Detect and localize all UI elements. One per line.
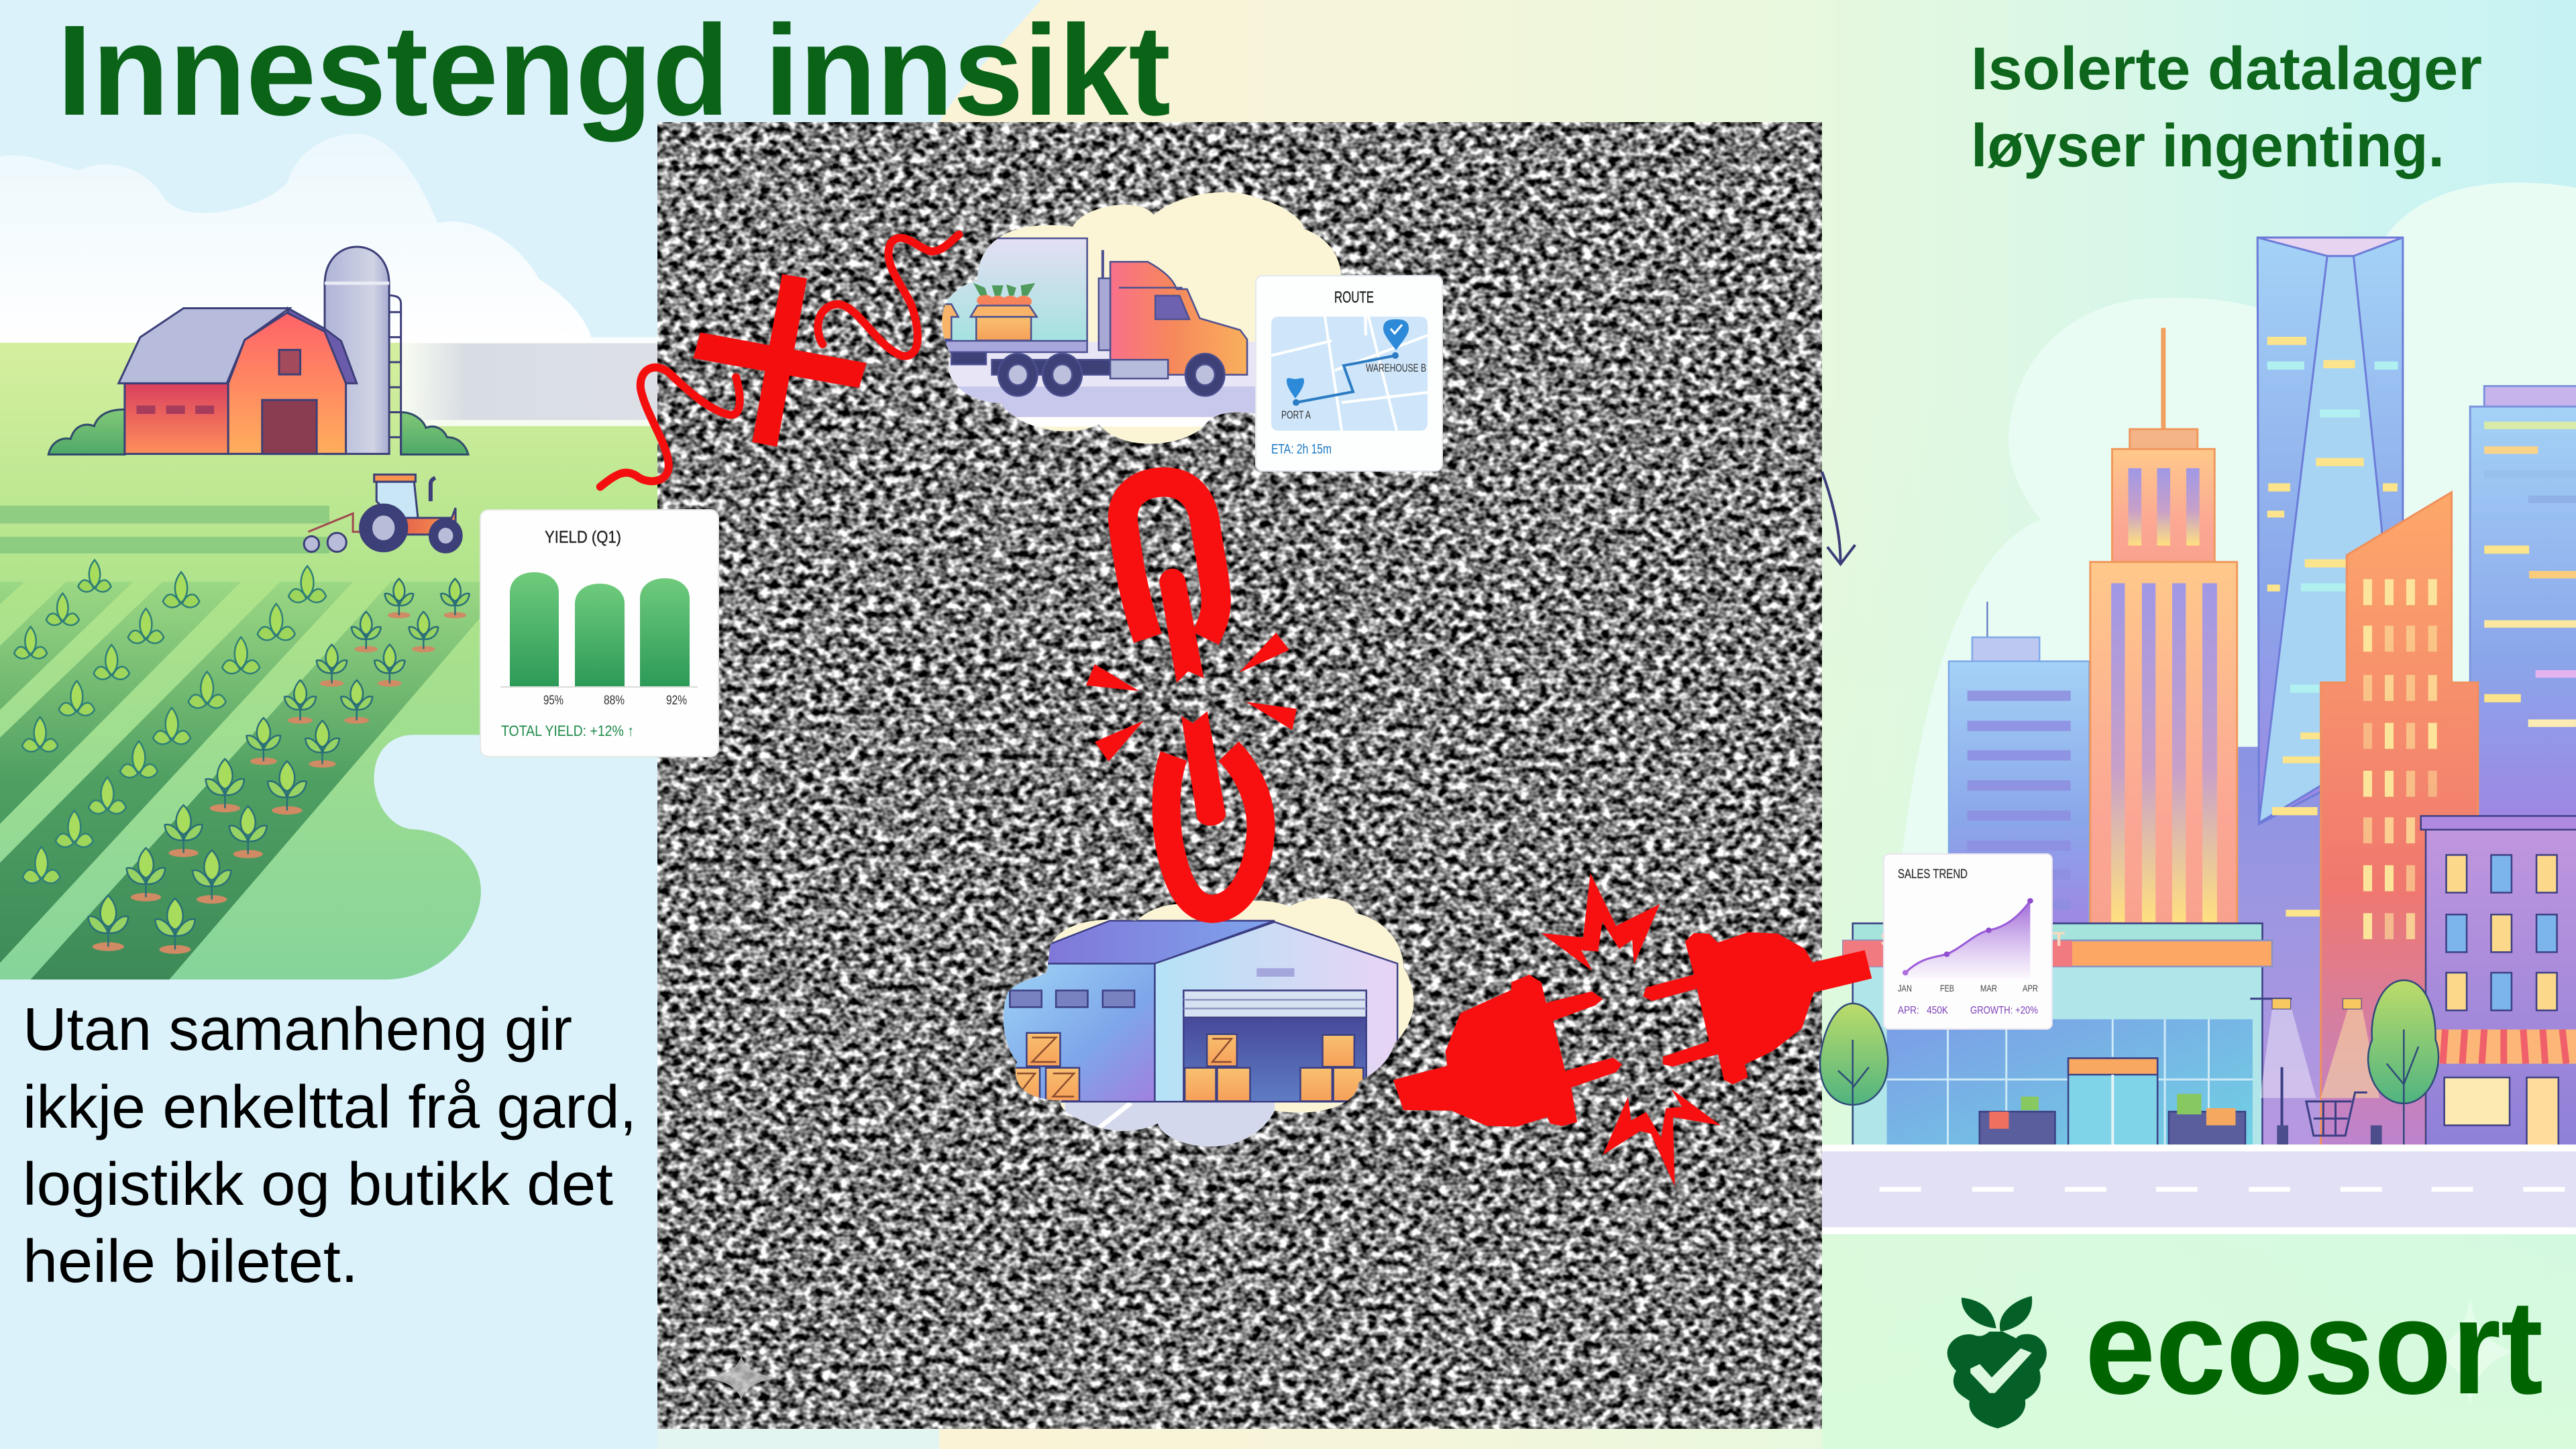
field	[0, 343, 659, 979]
card title: ROUTE	[1334, 288, 1374, 307]
icon: truck	[940, 238, 1247, 396]
map labels	[1281, 362, 1426, 421]
backdrop blobs	[1892, 182, 2576, 954]
icon: ecosort berry	[1947, 1296, 2047, 1428]
body text: logistikk og butikk det	[23, 1151, 613, 1218]
left blue building	[1949, 602, 2089, 928]
route card	[1256, 276, 1442, 471]
icon: warehouse	[993, 920, 1397, 1102]
month labels: JAN	[1898, 983, 1912, 994]
clouds	[0, 134, 593, 344]
silo	[325, 247, 401, 454]
arrow	[1822, 472, 1855, 564]
line chart	[1902, 898, 2033, 978]
barn	[119, 308, 357, 454]
right plug	[1643, 932, 1872, 1085]
yield card	[480, 510, 718, 757]
logo	[1947, 1273, 2543, 1428]
road	[1822, 1144, 2576, 1234]
card title: YIELD (Q1)	[545, 528, 621, 547]
city scene	[1820, 182, 2576, 1234]
pin	[1383, 319, 1409, 350]
tractor	[304, 474, 462, 552]
wavy broken connection	[600, 235, 1297, 909]
ETA: ETA: 2h 15m	[1271, 442, 1332, 457]
street lamps	[2250, 999, 2382, 1146]
month labels: APR	[2023, 983, 2038, 994]
glass tower	[2257, 237, 2403, 916]
heading: right: løyser ingenting.	[1971, 113, 2445, 180]
sales card	[1884, 854, 2052, 1029]
seedlings	[14, 560, 470, 954]
orange block	[2321, 492, 2478, 1149]
bar labels	[543, 694, 687, 708]
truck cloud	[942, 192, 1341, 444]
spark	[1603, 1089, 1721, 1187]
icon: sparkle	[706, 1356, 779, 1400]
month labels	[1898, 983, 2038, 994]
bar labels: 95%	[543, 694, 564, 708]
map	[1271, 317, 1428, 431]
stats: APR: 450K	[1898, 1005, 1948, 1016]
title: Innestengd innsikt	[57, 0, 1171, 142]
body text: Utan samanheng gir	[23, 996, 572, 1063]
total: TOTAL YIELD: +12% ↑	[501, 722, 634, 739]
stats	[1898, 1005, 2038, 1016]
spark	[1541, 873, 1660, 971]
noise panel	[657, 122, 1822, 1429]
sign letters	[1880, 928, 2065, 951]
crop rows	[0, 582, 480, 979]
body text: heile biletet.	[23, 1228, 358, 1295]
field bands	[0, 506, 329, 553]
month labels: FEB	[1940, 983, 1954, 994]
right tower	[2470, 386, 2576, 824]
heading: right	[1971, 36, 2482, 180]
bar labels: 88%	[604, 694, 625, 708]
month labels: MAR	[1980, 983, 1997, 994]
left plug	[1393, 975, 1622, 1126]
body text	[23, 996, 637, 1295]
crates and boxes	[1011, 1033, 1363, 1102]
crate with carrots	[940, 283, 1037, 340]
heading: right: Isolerte datalager	[1971, 36, 2482, 103]
map labels: WAREHOUSE B	[1366, 362, 1426, 374]
body text: ikkje enkelttal frå gard,	[23, 1074, 637, 1141]
broken chain	[1086, 482, 1297, 909]
trees	[1820, 980, 2438, 1146]
warehouse cloud	[993, 890, 1424, 1152]
sparkle	[2428, 1298, 2512, 1405]
road	[400, 337, 659, 426]
stats: GROWTH: +20%	[1970, 1005, 2038, 1016]
card title: SALES TREND	[1898, 867, 1968, 881]
bushes	[48, 409, 468, 455]
map labels: PORT A	[1281, 409, 1311, 421]
pin	[1287, 378, 1304, 398]
sign letters: S	[1880, 928, 1894, 951]
orange tower	[2090, 328, 2237, 925]
sign letters: T	[2053, 928, 2065, 951]
behind block	[2238, 747, 2326, 1150]
purple building	[2421, 816, 2576, 1148]
storefront	[1843, 924, 2272, 1146]
farm scene	[0, 134, 659, 979]
wordmark: ecosort	[2085, 1273, 2543, 1422]
bars	[510, 572, 690, 686]
bar labels: 92%	[666, 694, 687, 708]
red cross	[693, 274, 867, 447]
icon: shopping cart	[2306, 1093, 2367, 1136]
broken plug	[1393, 873, 1872, 1187]
